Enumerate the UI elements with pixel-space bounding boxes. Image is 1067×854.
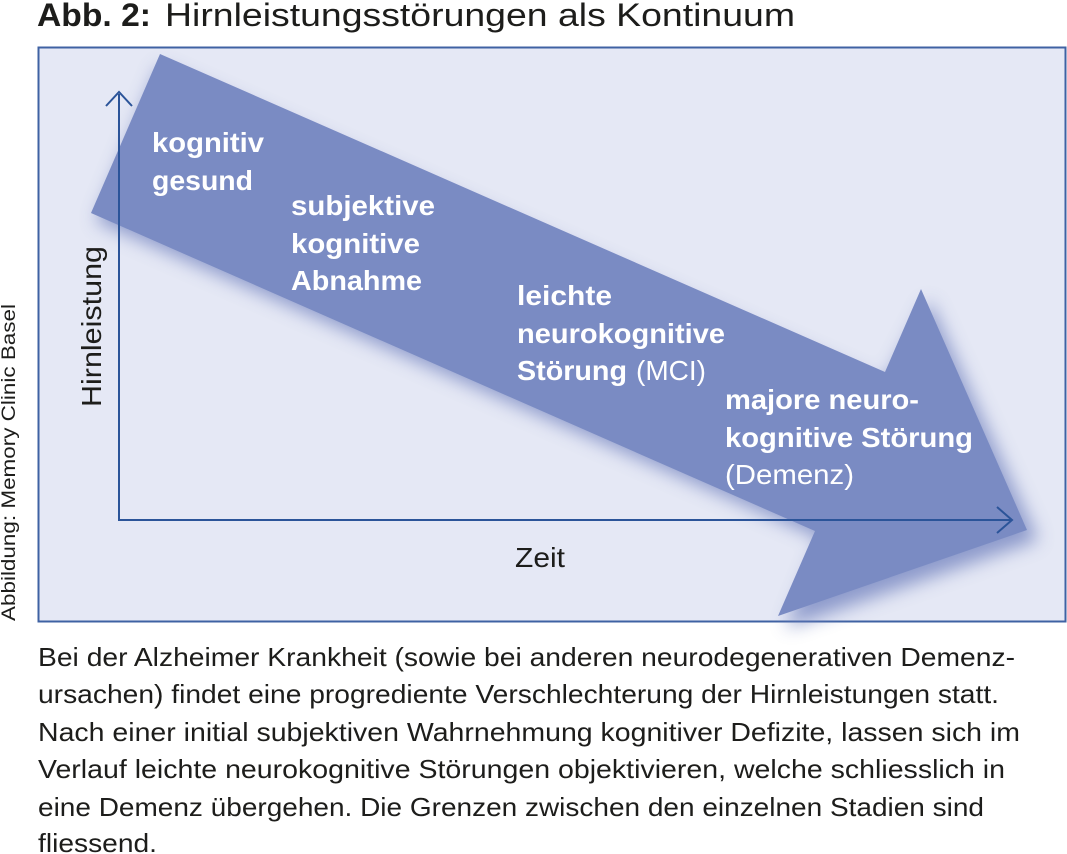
caption text: Verlauf leichte neurokognitive Störungen objektivieren, welche schliesslich in bbox=[38, 754, 1005, 784]
caption text bbox=[38, 642, 1020, 854]
y axis label: Hirnleistung bbox=[76, 246, 107, 407]
stage: majore neurokognitive Störung bbox=[725, 384, 973, 490]
arrow shadow bbox=[96, 66, 1038, 628]
stage: majore neurokognitive Störung: kognitive Störung bbox=[725, 422, 973, 453]
stage: majore neurokognitive Störung: majore neuro- bbox=[725, 384, 919, 415]
stage: kognitiv gesund: gesund bbox=[152, 165, 253, 196]
stage: subjektive kognitive Abnahme: Abnahme bbox=[291, 265, 422, 296]
stage: leichte neurokognitive Störung: Störung bbox=[517, 355, 627, 386]
x axis label: Zeit bbox=[515, 542, 565, 573]
stage: leichte neurokognitive Störung: (MCI) bbox=[636, 355, 706, 386]
stage: majore neurokognitive Störung: (Demenz) bbox=[725, 459, 854, 490]
stage: subjektive kognitive Abnahme bbox=[291, 190, 435, 296]
caption text: Bei der Alzheimer Krankheit (sowie bei anderen neurodegenerativen Demenz- bbox=[38, 642, 1015, 672]
stage: leichte neurokognitive Störung: leichte bbox=[517, 280, 612, 311]
large descending arrow bbox=[91, 54, 1027, 616]
stage: leichte neurokognitive Störung: neurokognitive bbox=[517, 318, 725, 349]
panel background bbox=[38, 48, 1066, 622]
axes bbox=[106, 92, 1012, 533]
diagram panel bbox=[38, 46, 1066, 636]
caption text: eine Demenz übergehen. Die Grenzen zwischen den einzelnen Stadien sind bbox=[38, 792, 984, 822]
caption text: ursachen) findet eine progrediente Verschlechterung der Hirnleistungen statt. bbox=[38, 679, 999, 709]
stage: kognitiv gesund bbox=[152, 127, 264, 196]
stage: leichte neurokognitive Störung bbox=[517, 280, 725, 386]
caption text: Nach einer initial subjektiven Wahrnehmung kognitiver Defizite, lassen sich im bbox=[38, 717, 1020, 747]
stage: subjektive kognitive Abnahme: subjektive bbox=[291, 190, 435, 221]
stage: kognitiv gesund: kognitiv bbox=[152, 127, 264, 158]
stage: subjektive kognitive Abnahme: kognitive bbox=[291, 228, 420, 259]
